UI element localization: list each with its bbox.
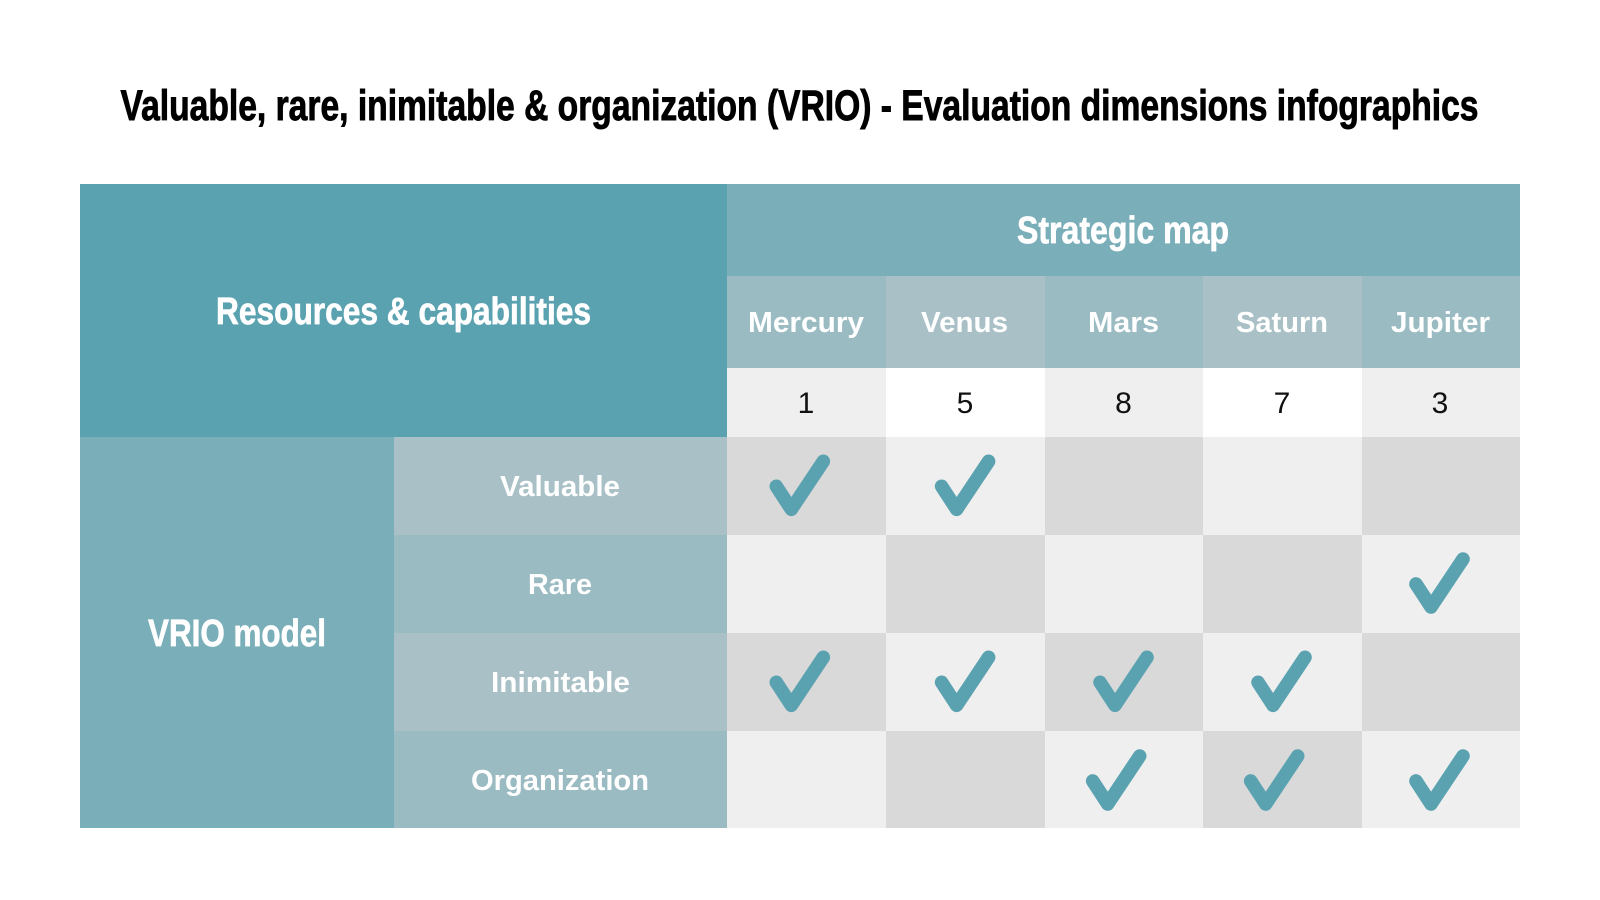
icon: check Rare Jupiter bbox=[1416, 559, 1463, 607]
icon: check Valuable Venus bbox=[942, 461, 989, 509]
panel: planet score row: 7 bbox=[1274, 387, 1290, 420]
panel: planet column headers: Mars bbox=[1088, 307, 1159, 339]
panel: resources and capabilities header: Resources & capabilities bbox=[216, 291, 591, 333]
panel: VRIO row labels: Rare bbox=[528, 569, 592, 601]
icon: check Organization Mars bbox=[1093, 756, 1140, 804]
panel: planet score row: 5 bbox=[957, 387, 973, 420]
panel: planet column headers: Saturn bbox=[1236, 307, 1328, 339]
panel: planet score row: 1 bbox=[798, 387, 814, 420]
icon: check Organization Saturn bbox=[1251, 756, 1298, 804]
panel: planet column headers: Jupiter bbox=[1391, 307, 1490, 339]
panel: evaluation grid cells bbox=[727, 437, 1520, 828]
panel: planet score row: 3 bbox=[1432, 387, 1448, 420]
panel: resources and capabilities header bbox=[80, 184, 727, 437]
panel: VRIO model header bbox=[80, 437, 394, 828]
panel: strategic map header bbox=[727, 184, 1520, 276]
panel: strategic map header: Strategic map bbox=[1017, 210, 1229, 252]
panel: planet column headers bbox=[727, 276, 1520, 368]
icon: check Inimitable Saturn bbox=[1258, 657, 1305, 705]
icon: check Organization Jupiter bbox=[1416, 756, 1463, 804]
panel: VRIO model header: VRIO model bbox=[148, 613, 326, 655]
icon: check Inimitable Mars bbox=[1100, 657, 1147, 705]
panel: planet column headers: Mercury bbox=[748, 307, 864, 339]
panel: VRIO row labels: Inimitable bbox=[491, 667, 630, 699]
panel: planet score row bbox=[727, 368, 1520, 437]
icon: check Inimitable Mercury bbox=[776, 657, 823, 705]
panel: planet score row: 8 bbox=[1115, 387, 1132, 420]
icon: check Inimitable Venus bbox=[942, 657, 989, 705]
icon: check Valuable Mercury bbox=[776, 461, 823, 509]
panel: VRIO row labels: Organization bbox=[471, 765, 649, 797]
panel: VRIO row labels: Valuable bbox=[500, 471, 620, 503]
panel: VRIO row labels bbox=[394, 437, 727, 828]
panel: planet column headers: Venus bbox=[921, 307, 1008, 339]
